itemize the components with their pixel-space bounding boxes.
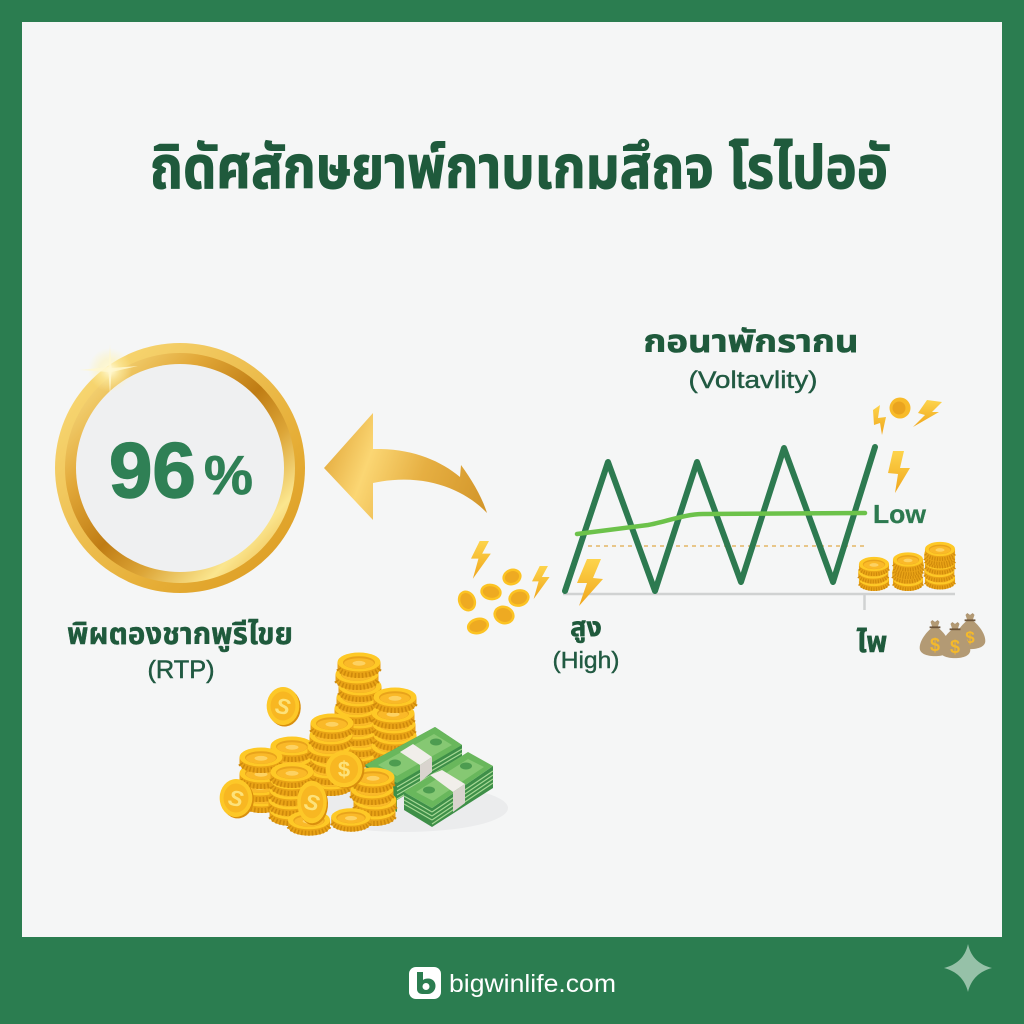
icon: footer four-point star	[944, 944, 992, 992]
coins: standing: S	[273, 693, 293, 720]
RTP value: 96	[109, 426, 196, 514]
low Thai label: ไพ	[857, 627, 887, 659]
high volatility line	[565, 447, 875, 591]
coin stack: front middle	[268, 762, 314, 826]
coins: standing	[216, 683, 364, 831]
icon: logo tile	[409, 967, 441, 999]
footer brand	[409, 967, 616, 999]
coins: standing: S	[226, 785, 246, 812]
icon: money bags: $	[950, 637, 960, 657]
High label: (High)	[552, 647, 620, 673]
icon: money bags: $	[930, 635, 940, 655]
icon: sparkle on ring	[80, 345, 138, 395]
volatility heading	[644, 324, 858, 394]
title: ถิดัศสักษยาพ์กาบเกมสึถจ โรไปออั	[150, 134, 890, 201]
volatility heading: (Voltavlity)	[688, 367, 818, 394]
icon: bolt by high	[577, 559, 603, 606]
panel: RTP gold ring	[55, 343, 305, 593]
RTP value	[109, 426, 253, 514]
target dashed line	[588, 545, 866, 547]
coins: standing: S	[302, 789, 323, 817]
icon: low coin stacks	[858, 542, 955, 591]
RTP label: พิผตองชากพูรีไขย	[67, 618, 293, 652]
pile shadow	[302, 784, 508, 832]
chart: volatility line chart	[563, 447, 955, 610]
volatility heading: กอนาพักรากน	[644, 324, 858, 359]
icon: bolts and coin top right	[873, 398, 942, 435]
icon: scattered small coins and bolts	[456, 541, 550, 635]
cash bundle: back	[365, 727, 462, 812]
coins: standing: $	[338, 757, 350, 782]
RTP label: (RTP)	[148, 656, 214, 684]
coin stack: tall back	[334, 652, 382, 768]
coin stack: left	[238, 748, 284, 813]
High label: สูง	[570, 612, 602, 643]
coins: flat front	[288, 808, 371, 836]
coin stack: front right	[350, 768, 396, 826]
icon: coins and cash pile	[216, 652, 508, 836]
High label	[552, 612, 620, 673]
RTP value: %	[204, 444, 253, 506]
cash bundle: front	[404, 752, 493, 827]
footer site name: bigwinlife.com	[449, 970, 616, 998]
icon: money bags	[920, 613, 985, 658]
coin stack: back right	[372, 688, 416, 762]
Low label: Low	[873, 499, 927, 529]
low volatility line	[577, 513, 865, 534]
icon: bolt right of chart	[888, 451, 910, 493]
icon: money bags: $	[965, 628, 975, 647]
arrow: curved gold arrow to ring	[324, 413, 487, 520]
coin stack: middle back	[270, 736, 314, 784]
RTP label	[67, 618, 293, 684]
coin stack: centre	[308, 714, 354, 796]
axis	[563, 594, 955, 610]
